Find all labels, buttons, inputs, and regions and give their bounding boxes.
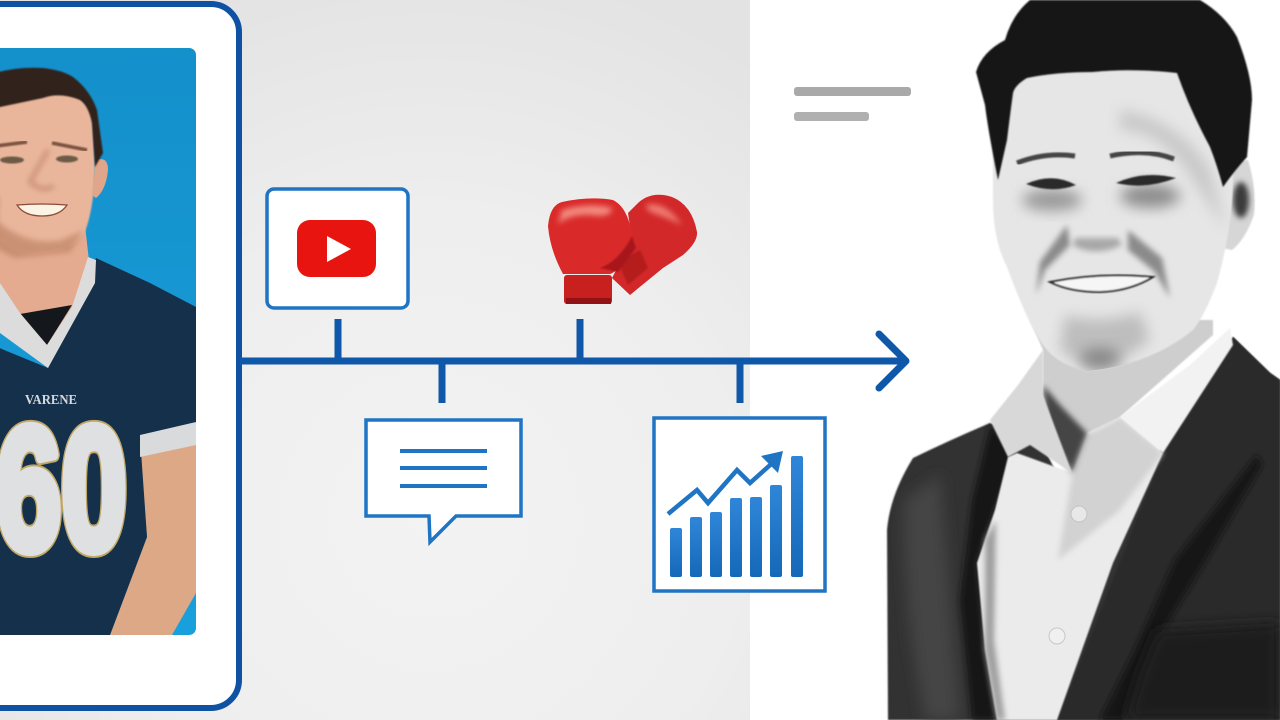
hair xyxy=(976,0,1252,187)
athlete: nose xyxy=(30,150,54,189)
eyes xyxy=(1026,178,1076,189)
icon: speech bubble xyxy=(366,420,521,542)
icon: video card xyxy=(267,189,408,308)
athlete: face shading xyxy=(0,221,83,260)
panel: athlete photo card xyxy=(0,4,239,708)
shirt buttons xyxy=(1071,506,1087,522)
face xyxy=(993,60,1240,371)
shirt fold shadow xyxy=(985,520,1005,720)
athlete: jersey xyxy=(0,258,196,635)
chart bars xyxy=(670,456,803,577)
icon: boxing gloves xyxy=(548,195,697,304)
athlete: eyes and brows xyxy=(0,142,87,150)
shirt collar left xyxy=(990,350,1072,473)
athlete: jersey sleeve stripe xyxy=(140,422,196,457)
jacket pocket xyxy=(1125,623,1280,720)
athlete photo xyxy=(0,48,196,635)
athlete: hair xyxy=(0,68,103,167)
shirt xyxy=(977,417,1163,720)
ear xyxy=(1222,160,1255,250)
jacket left highlight xyxy=(904,475,960,720)
athlete: neck xyxy=(0,225,90,350)
jacket xyxy=(887,337,1280,720)
face shading xyxy=(1022,110,1226,375)
neck shadow xyxy=(1043,385,1087,473)
glove cuff xyxy=(564,275,612,304)
eyebrows xyxy=(1017,153,1174,163)
mouth xyxy=(1050,275,1153,292)
timeline arrow xyxy=(240,319,906,403)
athlete: ear xyxy=(92,159,108,198)
chart trend arrow xyxy=(668,458,778,514)
background panel xyxy=(0,0,750,720)
athlete: collar xyxy=(0,257,96,368)
shirt placket shadow xyxy=(1058,417,1163,560)
professional portrait xyxy=(887,0,1280,720)
athlete: smile xyxy=(17,204,67,216)
neck xyxy=(1030,320,1213,473)
icon: growth chart xyxy=(654,418,825,591)
jersey text: VARENE xyxy=(25,393,77,408)
placeholder text lines xyxy=(794,87,911,121)
jacket inner shadow xyxy=(960,425,1017,720)
back glove xyxy=(612,195,697,295)
athlete: undershirt xyxy=(20,305,72,345)
shirt collar right xyxy=(1120,328,1233,453)
front glove xyxy=(548,198,633,274)
athlete: face xyxy=(0,94,96,242)
jacket lapel shadow xyxy=(1100,455,1262,720)
jacket right side xyxy=(1057,337,1280,720)
athlete: arm xyxy=(110,440,196,635)
